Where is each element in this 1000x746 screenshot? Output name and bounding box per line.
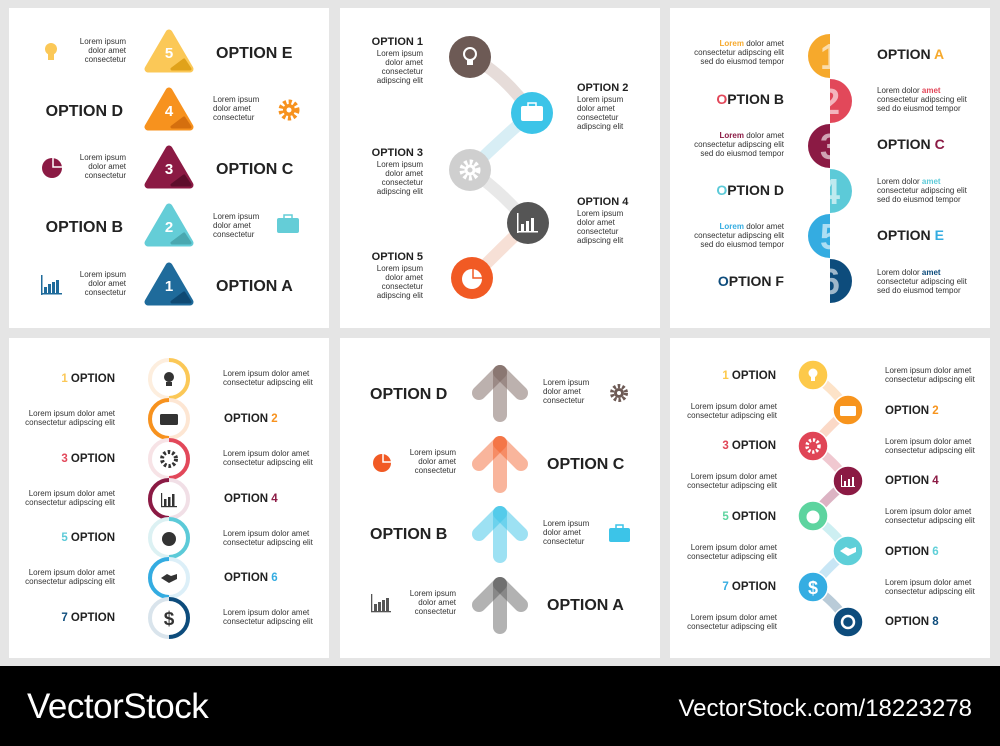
text: desc 4: sed do eiusmod tempor: [877, 195, 961, 204]
text: A desc: consectetur: [85, 288, 126, 297]
text: arrow descriptions: consectetur: [543, 396, 585, 405]
text: arrow descriptions: dolor amet: [543, 387, 582, 396]
half circle 6: 6: [820, 261, 840, 302]
circle 4 chart: [507, 202, 549, 244]
text: descriptions 1-8: consectetur adipscing elit: [687, 622, 778, 631]
labels: ring options: OPTION 6: [224, 572, 278, 584]
text: descriptions 1-8: consectetur adipscing elit: [687, 552, 778, 561]
half circle 1: [808, 34, 830, 78]
ring icons: $: [164, 609, 175, 630]
text: C desc: Lorem ipsum: [80, 153, 126, 162]
text: ring descriptions: consectetur adipscing elit: [223, 378, 314, 387]
arrow C: [479, 443, 521, 486]
rings: [150, 360, 188, 637]
text: descriptions 1-8: consectetur adipscing elit: [885, 587, 976, 596]
text: E desc: dolor amet: [88, 46, 127, 55]
text: arrow descriptions: Lorem ipsum: [410, 589, 456, 598]
label: option 3: consectetur: [382, 178, 423, 187]
triangle 2: [148, 207, 190, 243]
label: option D: OPTION D: [716, 182, 784, 198]
text: B desc: Lorem ipsum: [213, 212, 260, 221]
text: ring descriptions: Lorem ipsum dolor amet: [223, 369, 310, 378]
labels: ring options: 3 OPTION: [61, 453, 115, 465]
label: option 3: dolor amet: [385, 169, 424, 178]
text: desc 6: consectetur adipscing elit: [877, 277, 968, 286]
text: desc 3: Lorem dolor amet: [720, 131, 784, 140]
label: option 3: Lorem ipsum: [377, 160, 423, 169]
footer bar: [0, 666, 1000, 746]
text: arrow descriptions: Lorem ipsum: [543, 378, 590, 387]
icon: pie: [42, 157, 63, 178]
half circle 4: 4: [820, 171, 840, 212]
text: descriptions 1-8: Lorem ipsum dolor amet: [691, 472, 778, 481]
text: descriptions 1-8: Lorem ipsum dolor amet: [885, 507, 972, 516]
text: ring descriptions: Lorem ipsum dolor amet: [29, 489, 116, 498]
text: desc 1: sed do eiusmod tempor: [700, 57, 784, 66]
text: descriptions 1-8: consectetur adipscing elit: [687, 411, 778, 420]
panel: zigzag small circles: [670, 338, 990, 658]
circles: [798, 360, 863, 637]
label: option 1: adipscing elit: [377, 76, 424, 85]
ring icons: [160, 372, 178, 630]
text: E desc: consectetur: [85, 55, 126, 64]
panel: ring chain: [9, 338, 329, 658]
icons: arrows panel: [371, 386, 630, 612]
text: ring descriptions: consectetur adipscing elit: [25, 418, 116, 427]
label: option 1: dolor amet: [385, 58, 424, 67]
labels: ring options: 5 OPTION: [61, 532, 115, 544]
label: option 2: [577, 82, 628, 131]
label: option 4: consectetur: [577, 227, 619, 236]
circle icons: [806, 368, 856, 628]
arrow B: [479, 513, 521, 556]
label: option 4: dolor amet: [577, 218, 616, 227]
labels: options 1-8: OPTION 8: [885, 616, 939, 628]
text: descriptions 1-8: consectetur adipscing elit: [885, 516, 976, 525]
labels: options 1-8: 7 OPTION: [722, 581, 776, 593]
text: desc 5: sed do eiusmod tempor: [700, 240, 784, 249]
text: arrow descriptions: dolor amet: [543, 528, 582, 537]
label: option 1: [372, 36, 424, 85]
triangle 3: [148, 149, 190, 185]
text: D desc: consectetur: [213, 113, 255, 122]
labels: options 1-8: 5 OPTION: [722, 511, 776, 523]
text: descriptions 1-8: consectetur adipscing elit: [687, 481, 778, 490]
label: option 4: [577, 196, 629, 245]
text: ring descriptions: consectetur adipscing elit: [223, 458, 314, 467]
label: option 4: OPTION 4: [577, 196, 629, 208]
label: option 3: [372, 147, 424, 196]
text: ring descriptions: consectetur adipscing elit: [25, 498, 116, 507]
label: option 1: consectetur: [382, 67, 423, 76]
label: option 5: Lorem ipsum: [377, 264, 423, 273]
text: E desc: Lorem ipsum: [80, 37, 126, 46]
label: option 1: OPTION 1: [372, 36, 423, 48]
half circle 5: [808, 214, 830, 258]
labels: arrow options: OPTION C: [547, 456, 625, 473]
icon: bar chart: [41, 275, 62, 295]
triangle 4: [148, 91, 190, 127]
text: arrow descriptions: dolor amet: [418, 457, 457, 466]
label: option 5: adipscing elit: [377, 291, 424, 300]
text: C desc: consectetur: [85, 171, 126, 180]
text: desc 1: Lorem dolor amet: [720, 39, 784, 48]
text: arrow descriptions: dolor amet: [418, 598, 457, 607]
labels: options 1-8: OPTION 6: [885, 546, 939, 558]
text: desc 2: consectetur adipscing elit: [877, 95, 968, 104]
footer: url: VectorStock.com/18223278: [678, 695, 972, 722]
label: option D: OPTION D: [46, 103, 123, 120]
text: descriptions 1-8: Lorem ipsum dolor amet: [885, 578, 972, 587]
label: option 5: OPTION 5: [372, 251, 423, 263]
labels: options 1-8: OPTION 2: [885, 405, 939, 417]
text: A desc: dolor amet: [88, 279, 127, 288]
label: option E: OPTION E: [216, 45, 293, 62]
footer: brand: VectorStock: [27, 687, 209, 726]
text: descriptions 1-8: Lorem ipsum dolor amet: [691, 402, 778, 411]
text: ring descriptions: consectetur adipscing elit: [25, 577, 116, 586]
panel: zigzag circles: [340, 8, 660, 328]
label: option C: OPTION C: [216, 161, 294, 178]
text: ring descriptions: Lorem ipsum dolor amet: [29, 409, 116, 418]
text: ring descriptions: Lorem ipsum dolor amet: [29, 568, 116, 577]
circle 3 gear: [449, 149, 491, 191]
text: ring descriptions: consectetur adipscing elit: [223, 538, 314, 547]
label: option 2: dolor amet: [577, 104, 616, 113]
label: option 3: adipscing elit: [377, 187, 424, 196]
labels: ring options: 1 OPTION: [61, 373, 115, 385]
text: ring descriptions: [25, 369, 314, 626]
text: arrow descriptions: [410, 378, 590, 616]
connectors: [813, 375, 848, 622]
text: ring descriptions: Lorem ipsum dolor amet: [223, 608, 310, 617]
label: option 2: adipscing elit: [577, 122, 624, 131]
label: option C: OPTION C: [877, 136, 945, 152]
half circle 2: 2: [820, 81, 840, 122]
label: option 4: adipscing elit: [577, 236, 624, 245]
label: option A: OPTION A: [216, 278, 293, 295]
triangle 3: 3: [165, 161, 173, 178]
text: ring descriptions: consectetur adipscing elit: [223, 617, 314, 626]
label: option 5: consectetur: [382, 282, 423, 291]
label: option F: OPTION F: [718, 273, 784, 289]
text: descriptions 1-8: consectetur adipscing elit: [885, 375, 976, 384]
circle 2 briefcase: [511, 92, 553, 134]
text: descriptions 1-8: [687, 366, 976, 631]
label: option B: OPTION B: [46, 219, 123, 236]
label: option B: OPTION B: [716, 91, 784, 107]
circle 1 bulb: [449, 36, 491, 78]
labels: options 1-8: OPTION 4: [885, 475, 939, 487]
text: desc 4: consectetur adipscing elit: [877, 186, 968, 195]
labels: options 1-8: [722, 370, 939, 628]
panel: arrows: [340, 338, 660, 658]
text: desc 3: sed do eiusmod tempor: [700, 149, 784, 158]
text: descriptions 1-8: consectetur adipscing elit: [885, 446, 976, 455]
text: desc 2: Lorem dolor amet: [877, 86, 941, 95]
labels: arrow options: OPTION B: [370, 526, 447, 543]
triangle 5: 5: [165, 45, 173, 62]
panel: triangles: [9, 8, 329, 328]
icon: briefcase: [277, 215, 299, 233]
labels: arrow options: OPTION A: [547, 597, 624, 614]
half circle 5: 5: [820, 216, 840, 257]
label: option A: OPTION A: [877, 46, 944, 62]
text: ring descriptions: Lorem ipsum dolor amet: [223, 449, 310, 458]
text: arrow descriptions: Lorem ipsum: [410, 448, 456, 457]
labels: arrow options: [370, 386, 625, 614]
text: desc 3: consectetur adipscing elit: [694, 140, 785, 149]
connectors: [470, 57, 532, 278]
labels: ring options: OPTION 4: [224, 493, 278, 505]
text: arrow descriptions: Lorem ipsum: [543, 519, 590, 528]
triangle 5: [148, 33, 190, 69]
labels: options 1-8: 1 OPTION: [722, 370, 776, 382]
text: desc 4: Lorem dolor amet: [877, 177, 941, 186]
text: descriptions 1-8: Lorem ipsum dolor amet: [691, 543, 778, 552]
text: descriptions 1-8: Lorem ipsum dolor amet: [885, 366, 972, 375]
text: D desc: Lorem ipsum: [213, 95, 260, 104]
labels: options 1-8: 3 OPTION: [722, 440, 776, 452]
text: B desc: consectetur: [213, 230, 255, 239]
text: C desc: dolor amet: [88, 162, 127, 171]
label: option E: OPTION E: [877, 227, 944, 243]
text: descriptions 1-8: Lorem ipsum dolor amet: [885, 437, 972, 446]
icon: bulb: [45, 43, 57, 60]
text: desc 6: Lorem dolor amet: [877, 268, 941, 277]
labels: ring options: [61, 373, 278, 624]
text: desc 5: Lorem dolor amet: [720, 222, 784, 231]
text: descriptions 1-8: Lorem ipsum dolor amet: [691, 613, 778, 622]
circle icons: $: [808, 578, 818, 598]
half circle 6: [830, 259, 852, 303]
label: option 3: OPTION 3: [372, 147, 423, 159]
triangle 4: 4: [165, 103, 174, 120]
triangle 2: 2: [165, 219, 173, 236]
triangle 1: [148, 266, 190, 302]
label: option 2: consectetur: [577, 113, 619, 122]
label: option 2: Lorem ipsum: [577, 95, 624, 104]
half circle 4: [830, 169, 852, 213]
label: option 2: OPTION 2: [577, 82, 628, 94]
text: A desc: Lorem ipsum: [80, 270, 126, 279]
arrow D: [479, 372, 521, 415]
label: option 4: Lorem ipsum: [577, 209, 624, 218]
half circle 3: 3: [820, 126, 840, 167]
labels: ring options: OPTION 2: [224, 413, 278, 425]
text: arrow descriptions: consectetur: [543, 537, 585, 546]
half circle 2: [830, 79, 852, 123]
labels: ring options: 7 OPTION: [61, 612, 115, 624]
text: D desc: dolor amet: [213, 104, 252, 113]
label: option 5: [372, 251, 424, 300]
arrow A: [479, 584, 521, 627]
panel: half circles: [670, 8, 990, 328]
text: arrow descriptions: consectetur: [415, 607, 456, 616]
text: arrow descriptions: consectetur: [415, 466, 456, 475]
text: ring descriptions: Lorem ipsum dolor amet: [223, 529, 310, 538]
text: desc 1: consectetur adipscing elit: [694, 48, 785, 57]
labels: arrow options: OPTION D: [370, 386, 447, 403]
half circle 3: [808, 124, 830, 168]
text: B desc: dolor amet: [213, 221, 252, 230]
triangle 1: 1: [165, 278, 173, 295]
half circle 1: 1: [820, 36, 840, 77]
label: option 5: dolor amet: [385, 273, 424, 282]
icon: gear: [281, 102, 297, 118]
label: option 1: Lorem ipsum: [377, 49, 423, 58]
text: desc 5: consectetur adipscing elit: [694, 231, 785, 240]
text: desc 6: sed do eiusmod tempor: [877, 286, 961, 295]
text: desc 2: sed do eiusmod tempor: [877, 104, 961, 113]
circle 5 pie: [451, 257, 493, 299]
